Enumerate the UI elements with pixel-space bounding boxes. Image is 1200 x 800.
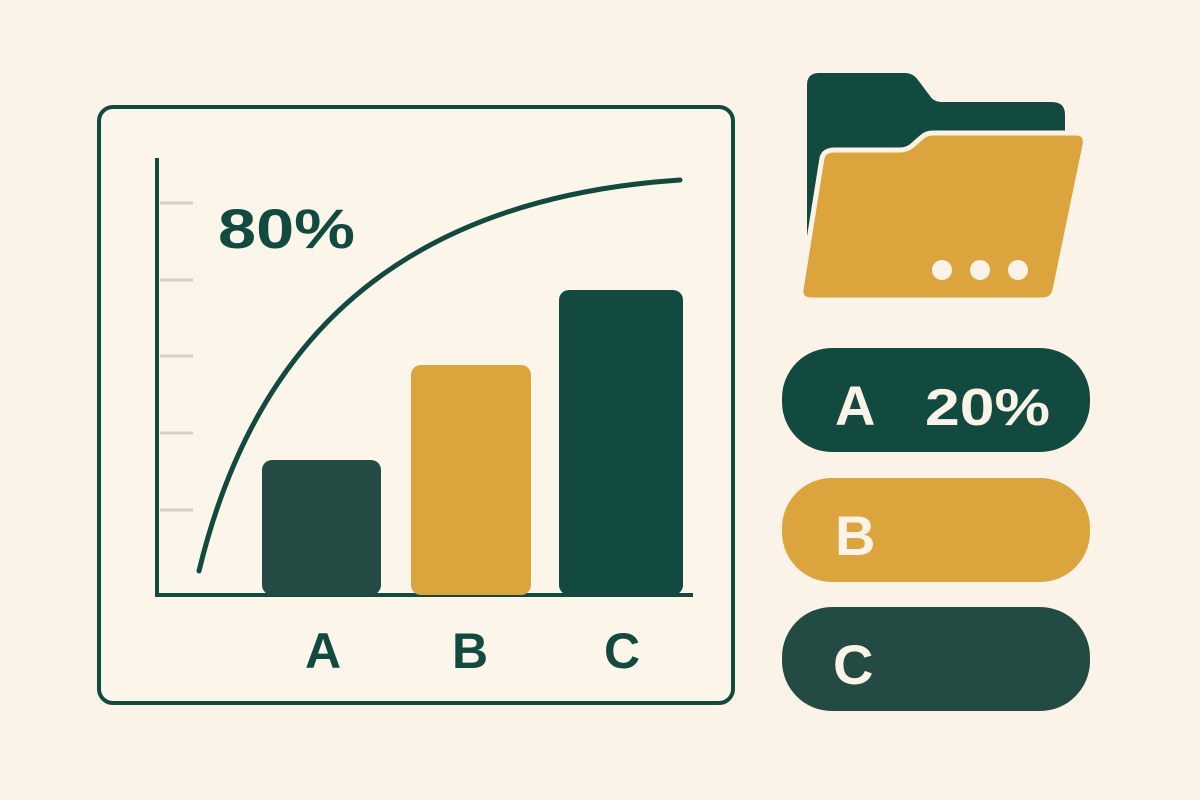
label 80%: 80% <box>218 197 355 260</box>
pill A 20%: A <box>835 374 875 437</box>
pill C <box>782 607 1090 711</box>
bar C <box>559 290 683 595</box>
icon: folder <box>801 73 1085 300</box>
category labels: C <box>604 623 640 679</box>
pill C: C <box>833 633 873 696</box>
axes <box>155 158 693 596</box>
y-axis ticks <box>160 203 193 510</box>
pill A 20%: 20% <box>925 379 1050 437</box>
cumulative curve <box>199 180 680 571</box>
bar A <box>262 460 381 595</box>
category labels: B <box>452 623 488 679</box>
category labels <box>305 623 640 679</box>
bar B <box>411 365 531 595</box>
panel: chart frame <box>99 107 733 703</box>
category labels: A <box>305 623 341 679</box>
pill A 20% <box>782 348 1090 452</box>
pill B: B <box>835 504 875 567</box>
pill B <box>782 478 1090 582</box>
